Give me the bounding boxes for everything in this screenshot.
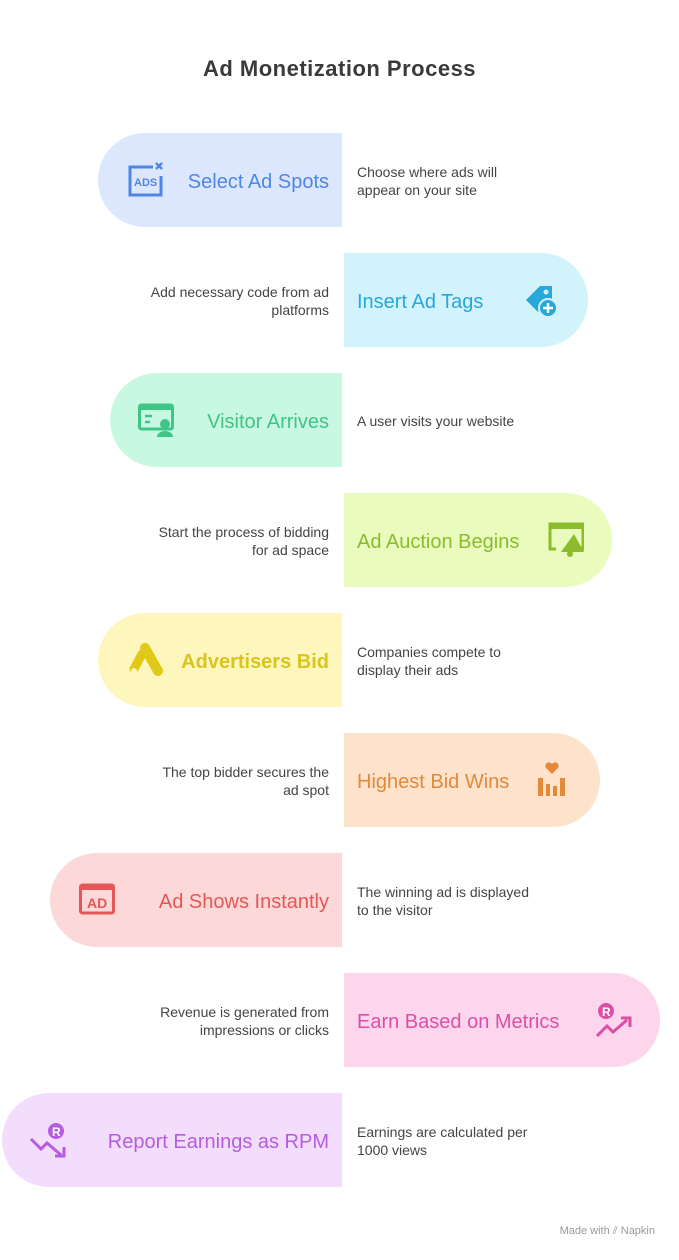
panel: ad auction begins bbox=[344, 493, 612, 587]
panel: select ad spots bbox=[98, 133, 342, 227]
footer credit: Made with ⫽ Napkin bbox=[560, 1225, 655, 1237]
panel: insert ad tags bbox=[344, 253, 588, 347]
panel: advertisers bid bbox=[98, 613, 342, 707]
description: The winning ad is displayed bbox=[357, 884, 529, 900]
icon: visitor bbox=[138, 404, 174, 437]
icon: ads: ADS bbox=[134, 177, 157, 189]
icon: rupee down: R bbox=[52, 1125, 61, 1139]
description: to the visitor bbox=[357, 902, 432, 918]
description bbox=[150, 284, 329, 318]
label: Visitor Arrives bbox=[207, 411, 329, 433]
icon: ads bbox=[128, 162, 163, 196]
icon: megaphone screen bbox=[548, 522, 584, 557]
label: Earn Based on Metrics bbox=[357, 1011, 559, 1033]
title: Ad Monetization Process bbox=[203, 56, 476, 81]
icon: bars heart bbox=[538, 762, 565, 796]
panel: highest bid wins bbox=[344, 733, 600, 827]
icon: rupee up bbox=[596, 1003, 632, 1037]
icon: ad window: AD bbox=[87, 895, 107, 911]
description: Companies compete to bbox=[357, 644, 501, 660]
description: ad spot bbox=[283, 782, 329, 798]
description bbox=[162, 764, 329, 798]
description: 1000 views bbox=[357, 1142, 427, 1158]
description bbox=[357, 1124, 528, 1158]
description bbox=[357, 644, 501, 678]
icon: rupee up: R bbox=[602, 1005, 611, 1019]
panel: ad shows instantly bbox=[50, 853, 342, 947]
icon: ad window bbox=[79, 884, 115, 914]
panel: visitor arrives bbox=[110, 373, 342, 467]
label: Highest Bid Wins bbox=[357, 771, 509, 793]
description: appear on your site bbox=[357, 182, 477, 198]
description bbox=[357, 164, 497, 198]
label: Insert Ad Tags bbox=[357, 291, 483, 313]
description: impressions or clicks bbox=[200, 1022, 329, 1038]
description bbox=[160, 1004, 329, 1038]
description bbox=[159, 524, 329, 558]
panel: report earnings as rpm bbox=[2, 1093, 342, 1187]
icon: rupee down bbox=[30, 1123, 66, 1158]
label: Report Earnings as RPM bbox=[108, 1131, 329, 1153]
description: Revenue is generated from bbox=[160, 1004, 329, 1020]
description: The top bidder secures the bbox=[162, 764, 329, 780]
description: Start the process of bidding bbox=[159, 524, 329, 540]
label: Ad Auction Begins bbox=[357, 531, 519, 553]
description: Add necessary code from ad bbox=[151, 284, 329, 300]
description: display their ads bbox=[357, 662, 458, 678]
description: Choose where ads will bbox=[357, 164, 497, 180]
icon: ads logo bbox=[130, 643, 163, 676]
description bbox=[357, 884, 529, 918]
description: for ad space bbox=[252, 542, 329, 558]
icon: tag bbox=[526, 286, 556, 316]
label: Advertisers Bid bbox=[181, 651, 329, 673]
description: A user visits your website bbox=[357, 413, 514, 429]
label: Select Ad Spots bbox=[188, 171, 329, 193]
description: platforms bbox=[271, 302, 329, 318]
label: Ad Shows Instantly bbox=[159, 891, 329, 913]
description: Earnings are calculated per bbox=[357, 1124, 527, 1140]
panel: earn based on metrics bbox=[344, 973, 660, 1067]
